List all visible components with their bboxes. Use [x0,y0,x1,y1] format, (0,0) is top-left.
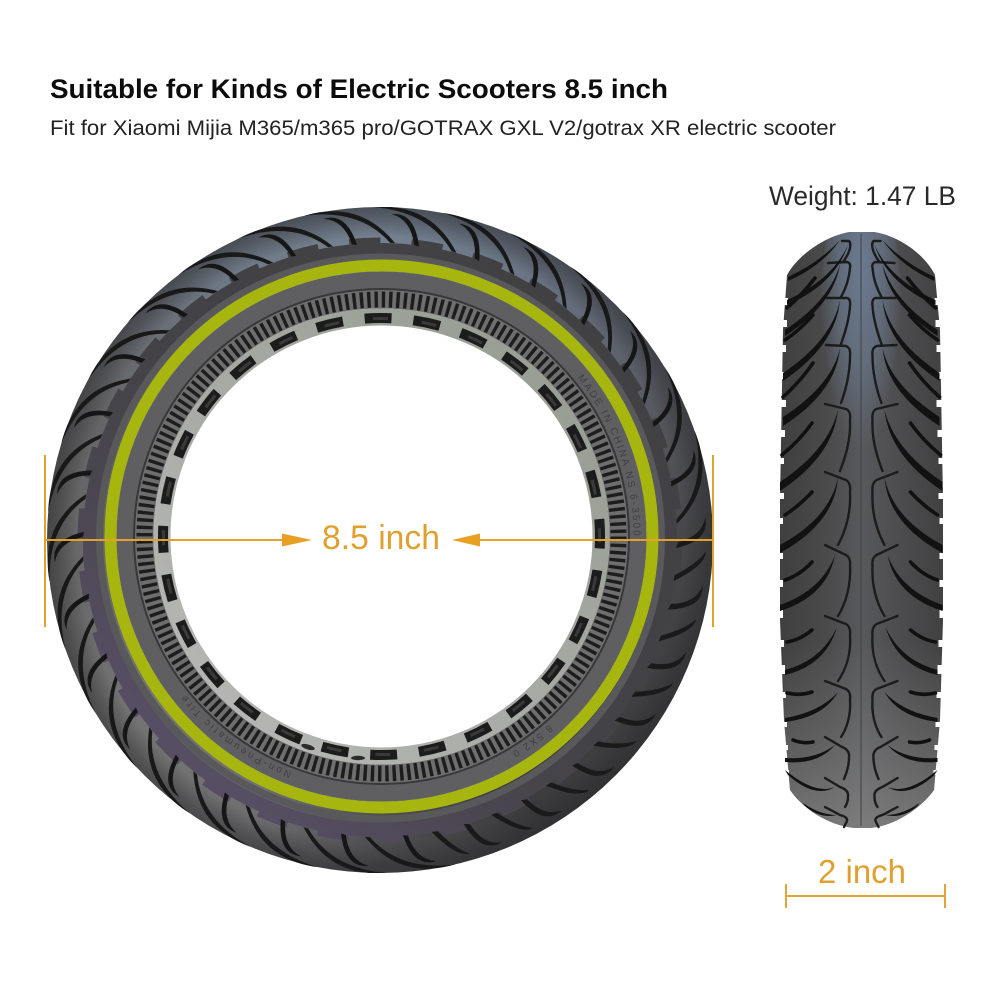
embossed sidewall text: 8.5X2.0 [514,726,552,757]
left end tick [44,455,46,627]
tire tread base [47,207,713,873]
left arrow [45,534,312,546]
right tread pattern [872,240,948,827]
title: Suitable for Kinds of Electric Scooters 8.5 inch [50,74,668,104]
right arrow [452,534,713,546]
left tread pattern [775,240,850,827]
inner grey sidewall [126,280,638,792]
weight label: Weight: 1.47 LB [769,181,956,211]
width label: 2 inch [818,853,906,890]
dark sidewall band with stepped edge [81,241,679,839]
tire rings and grooves [48,207,706,873]
diameter dimension [44,455,714,627]
embossed sidewall text [182,374,640,778]
white wheel opening [116,272,646,802]
toothed ring [134,289,629,784]
front view tire [47,207,712,873]
embossed sidewall text: Non-Pneumatic Tire [182,696,291,778]
tire body silhouette [780,232,943,828]
perforated inner ring [162,317,601,756]
yellow stripe [110,266,652,808]
small bottom vents [301,743,365,760]
diameter label: 8.5 inch [322,519,440,557]
centre seam [860,234,862,826]
width bracket [786,884,945,908]
tread grooves [46,205,714,875]
subtitle: Fit for Xiaomi Mijia M365/m365 pro/GOTRAX GXL V2/gotrax XR electric scooter [50,117,836,140]
right end tick [712,455,714,627]
embossed sidewall text: MADE IN CHINA NS 6-3500 [578,374,640,536]
side view tire [780,232,943,828]
